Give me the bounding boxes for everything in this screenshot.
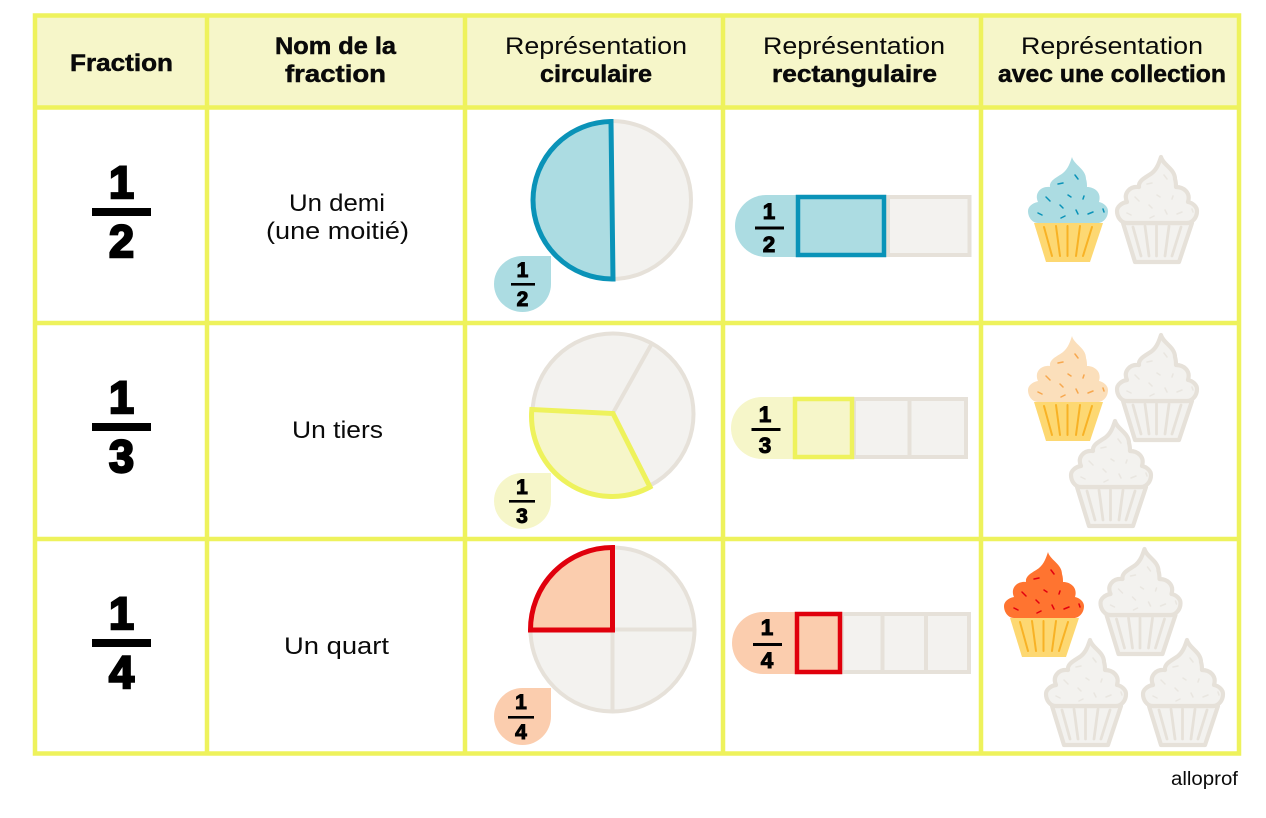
label bubble: one half	[494, 256, 551, 312]
rectangle: one third: 1	[759, 402, 771, 427]
fraction: one half: 2	[109, 216, 134, 267]
label bubble: one quarter	[494, 688, 551, 745]
cupcake: grey	[1117, 335, 1197, 440]
cupcake: grey	[1046, 640, 1126, 745]
heading: Nom de la fraction	[275, 33, 397, 88]
table: header background	[35, 15, 1239, 107]
label bubble: one half: 1	[517, 259, 529, 282]
label bubble: one third	[494, 473, 551, 529]
name: un demi: (une moitié)	[266, 218, 409, 245]
name: un quart: Un quart	[284, 633, 389, 660]
rectangle: one quarter: 4	[761, 648, 774, 673]
fraction: one third	[92, 372, 151, 482]
fraction: one quarter	[92, 588, 151, 698]
cupcake: grey	[1117, 157, 1197, 262]
circle: one quarter	[530, 548, 695, 712]
heading: Représentation circulaire: Représentation	[505, 33, 687, 60]
cupcake: grey	[1143, 640, 1223, 745]
rectangle: one third: 3	[759, 433, 771, 458]
circle: one half	[533, 121, 691, 279]
heading: Représentation rectangulaire	[763, 33, 945, 88]
label bubble: one half: 2	[517, 288, 528, 311]
fraction: one third: 1	[109, 372, 134, 423]
rectangle: one third	[731, 397, 966, 459]
label bubble: one third: 3	[516, 505, 528, 528]
cupcake: grey	[1071, 421, 1151, 526]
label bubble: one quarter: 1	[515, 691, 527, 714]
heading: Représentation avec une collection: Représentation	[1021, 33, 1203, 60]
cupcake: coloured blue	[1028, 157, 1108, 262]
heading: Nom de la fraction: fraction	[285, 61, 386, 88]
fraction: one half	[92, 157, 151, 267]
label bubble: one quarter: 4	[515, 721, 527, 744]
cupcake: grey	[1100, 549, 1180, 654]
fraction: one third: 3	[109, 431, 134, 482]
fraction: one quarter: 1	[109, 588, 134, 639]
heading: Représentation circulaire: circulaire	[540, 61, 652, 88]
fraction: one quarter: 4	[109, 647, 134, 698]
heading: Représentation circulaire	[505, 33, 687, 88]
rectangle: one quarter	[732, 612, 969, 674]
rectangle: one half: 1	[763, 199, 775, 224]
label bubble: one third: 1	[516, 476, 528, 499]
name: un tiers: Un tiers	[292, 417, 383, 444]
heading: Représentation avec une collection: avec une collection	[998, 61, 1226, 88]
heading: Représentation rectangulaire: rectangulaire	[772, 61, 937, 88]
rectangle: one quarter: 1	[761, 615, 773, 640]
fraction: one half: 1	[109, 157, 134, 208]
heading: Représentation avec une collection	[998, 33, 1226, 88]
name: un demi	[266, 190, 409, 245]
heading: Nom de la fraction: Nom de la	[275, 33, 397, 60]
rectangle: one half: 2	[763, 232, 775, 257]
cupcake: coloured peach	[1028, 336, 1108, 441]
rectangle: one half	[735, 195, 970, 257]
cupcake: coloured orange	[1004, 552, 1084, 657]
circle: one third	[532, 334, 694, 497]
heading: Fraction: Fraction	[70, 50, 173, 77]
name: un demi: Un demi	[289, 190, 385, 217]
logo: alloprof: alloprof	[1171, 769, 1239, 790]
heading: Représentation rectangulaire: Représentation	[763, 33, 945, 60]
